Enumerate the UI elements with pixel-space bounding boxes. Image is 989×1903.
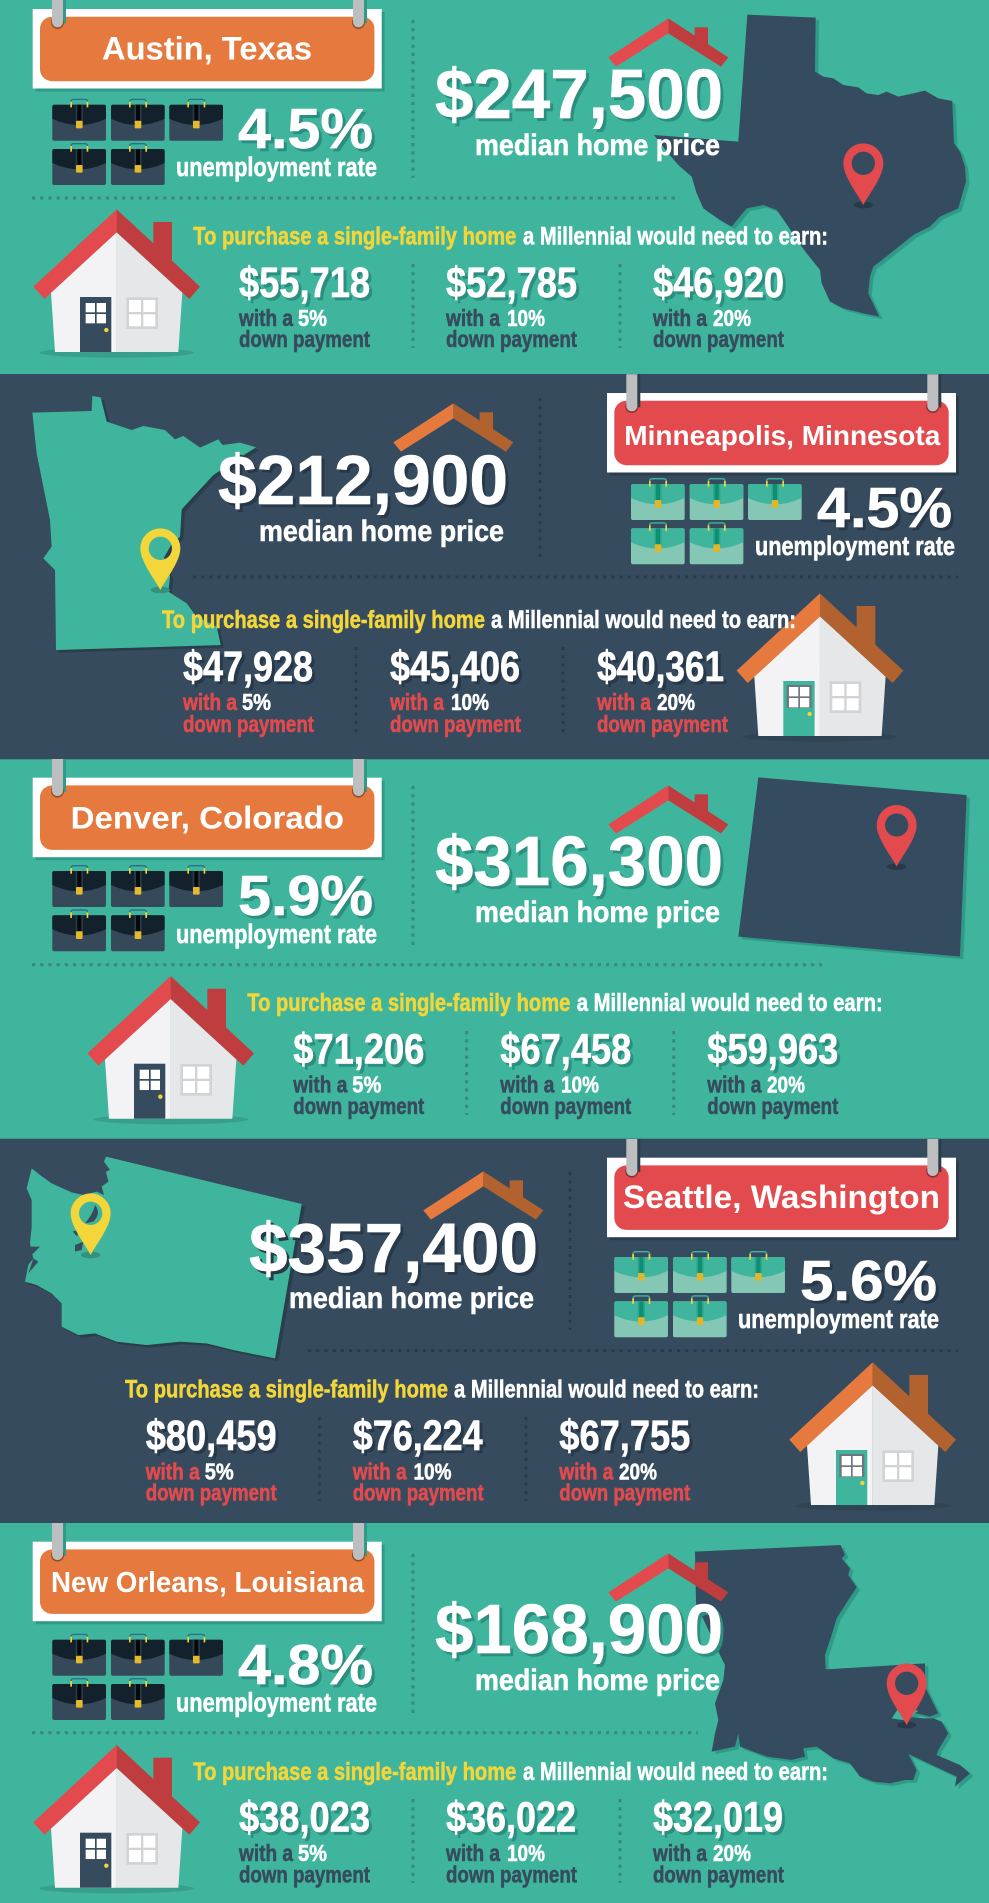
sign: New Orleans, Louisiana	[33, 1523, 385, 1624]
icon: roof over price	[393, 403, 513, 452]
heading: income needed: a Millennial would need to earn:	[454, 1376, 759, 1404]
icon: five briefcases	[52, 99, 223, 185]
column: 10% down: 10%	[507, 305, 545, 331]
column: 20% down: 20%	[713, 1840, 751, 1866]
column: 10% down	[445, 1794, 577, 1887]
stat: unemployment rate: unemployment rate	[176, 1688, 377, 1718]
column: 20% down: with a	[596, 689, 651, 715]
column: 5% down	[292, 1025, 425, 1119]
column: 5% down: down payment	[239, 326, 370, 352]
stat: median home price: $168,900	[435, 1590, 723, 1668]
column: 20% down: $67,755	[559, 1412, 690, 1460]
heading: income needed	[193, 222, 828, 250]
column: 5% down	[238, 259, 370, 352]
column: 20% down: with a	[558, 1458, 613, 1484]
column: 5% down: 5%	[298, 305, 327, 331]
column: 20% down	[596, 643, 728, 737]
sign: Austin, Texas	[33, 0, 385, 91]
heading: income needed: To purchase a single-family home	[125, 1376, 448, 1404]
column: 5% down: $47,928	[183, 643, 313, 691]
icon: roof over price	[608, 1553, 728, 1602]
column: 10% down: $76,224	[353, 1412, 483, 1460]
column: 10% down: 10%	[561, 1072, 599, 1098]
column: 5% down: 5%	[205, 1458, 234, 1484]
column: 10% down: 10%	[414, 1458, 452, 1484]
sign: Seattle, Washington	[607, 1139, 959, 1240]
column: 5% down: $38,023	[239, 1794, 370, 1842]
column: 10% down: $45,406	[390, 643, 520, 691]
column: 10% down: down payment	[353, 1480, 484, 1506]
column: 20% down: 20%	[767, 1072, 805, 1098]
column: 5% down: 5%	[352, 1072, 381, 1098]
sign: Denver, Colorado	[33, 759, 385, 860]
sign: Minneapolis, Minnesota: Minneapolis, Minnesota	[624, 420, 941, 451]
column: 5% down: with a	[238, 1840, 293, 1866]
panel: New Orleans, Louisiana	[32, 1523, 970, 1893]
column: 10% down	[445, 259, 577, 352]
stat: unemployment rate: unemployment rate	[176, 919, 377, 949]
icon: roof over price	[608, 785, 728, 834]
panel: Minneapolis, Minnesota	[0, 374, 989, 759]
stat: unemployment rate: unemployment rate	[738, 1304, 939, 1334]
stat: unemployment rate	[176, 1633, 377, 1718]
icon: roof over price	[608, 18, 728, 67]
map: Colorado	[738, 777, 967, 957]
icon: roof over price	[423, 1171, 543, 1220]
column: 5% down	[182, 643, 314, 737]
column: 10% down: down payment	[446, 1861, 577, 1887]
sign: Austin, Texas: Austin, Texas	[102, 30, 312, 66]
stat: unemployment rate	[738, 1249, 939, 1334]
icon: house	[789, 1362, 956, 1511]
panel: Austin, Texas	[32, 0, 966, 358]
stat: median home price: median home price	[289, 1282, 534, 1315]
column: 10% down: $67,458	[500, 1025, 631, 1073]
column: 20% down: with a	[706, 1072, 761, 1098]
column: 5% down: 5%	[298, 1840, 327, 1866]
column: 5% down: $71,206	[293, 1025, 424, 1073]
column: 20% down: 20%	[657, 689, 695, 715]
column: 10% down: with a	[389, 689, 444, 715]
map: Louisiana	[695, 1545, 970, 1787]
column: 5% down: with a	[182, 689, 237, 715]
column: 20% down	[652, 1794, 784, 1887]
column: 5% down: down payment	[146, 1480, 277, 1506]
section background	[0, 1139, 989, 1523]
stat: median home price: $247,500	[435, 55, 723, 133]
stat: unemployment rate: 5.6%	[800, 1249, 937, 1313]
column: 5% down: $80,459	[146, 1412, 277, 1460]
icon: house	[737, 593, 903, 742]
map: Minnesota	[32, 396, 256, 650]
panel: Denver, Colorado	[32, 759, 967, 1124]
column: 10% down: $52,785	[446, 259, 577, 307]
heading: income needed: To purchase a single-family home	[247, 989, 570, 1017]
heading: income needed	[247, 989, 883, 1017]
icon: five briefcases	[614, 1252, 785, 1337]
stat: unemployment rate: 5.9%	[238, 864, 373, 928]
column: 10% down: with a	[499, 1072, 554, 1098]
column: 20% down: down payment	[707, 1093, 839, 1119]
column: 5% down: down payment	[183, 711, 314, 737]
column: 20% down	[652, 259, 784, 352]
column: 5% down: down payment	[239, 1861, 370, 1887]
column: 5% down: with a	[238, 305, 293, 331]
column: 10% down: with a	[445, 1840, 500, 1866]
stat: median home price: median home price	[475, 129, 720, 162]
column: 20% down: 20%	[713, 305, 751, 331]
column: 20% down: with a	[652, 305, 707, 331]
column: 20% down: down payment	[653, 1861, 784, 1887]
column: 10% down	[499, 1025, 632, 1119]
heading: income needed: a Millennial would need to earn:	[523, 1758, 828, 1786]
column: 10% down: down payment	[390, 711, 521, 737]
column: 5% down	[145, 1412, 277, 1506]
column: 20% down: $40,361	[597, 643, 724, 691]
heading: income needed	[162, 606, 796, 634]
column: 20% down: down payment	[559, 1480, 691, 1506]
sign: New Orleans, Louisiana: New Orleans, Louisiana	[51, 1567, 365, 1599]
column: 10% down: 10%	[451, 689, 489, 715]
heading: income needed: To purchase a single-family home	[193, 222, 516, 250]
column: 5% down: $55,718	[239, 259, 370, 307]
stat: unemployment rate: 4.8%	[238, 1633, 373, 1697]
section background	[0, 374, 989, 759]
column: 20% down: $32,019	[653, 1794, 783, 1842]
column: 20% down: with a	[652, 1840, 707, 1866]
icon: house	[33, 209, 200, 358]
icon: house	[33, 1745, 200, 1893]
column: 10% down	[389, 643, 521, 737]
sign: Denver, Colorado: Denver, Colorado	[71, 799, 344, 835]
column: 10% down: $36,022	[446, 1794, 576, 1842]
column: 10% down: down payment	[500, 1093, 632, 1119]
stat: unemployment rate: 4.5%	[238, 97, 373, 161]
column: 10% down	[352, 1412, 484, 1506]
map: Texas	[654, 15, 966, 317]
column: 5% down: with a	[145, 1458, 200, 1484]
sign: Seattle, Washington: Seattle, Washington	[623, 1179, 940, 1215]
column: 20% down: $59,963	[707, 1025, 838, 1073]
column: 20% down: down payment	[597, 711, 728, 737]
icon: five briefcases	[631, 479, 802, 564]
column: 20% down: $46,920	[653, 259, 784, 307]
heading: income needed: a Millennial would need to earn:	[577, 989, 883, 1017]
column: 20% down	[706, 1025, 839, 1119]
stat: median home price: $357,400	[249, 1209, 538, 1287]
stat: median home price: $212,900	[218, 441, 508, 519]
column: 5% down	[238, 1794, 370, 1887]
column: 20% down	[558, 1412, 691, 1506]
heading: income needed	[193, 1758, 828, 1786]
icon: house	[87, 976, 254, 1124]
heading: income needed: a Millennial would need to earn:	[491, 606, 796, 634]
panel: Seattle, Washington	[0, 1139, 989, 1523]
stat: unemployment rate	[176, 97, 377, 182]
column: 5% down: down payment	[293, 1093, 425, 1119]
stat: median home price: median home price	[475, 896, 720, 929]
stat: median home price: median home price	[259, 515, 504, 548]
column: 20% down: 20%	[619, 1458, 657, 1484]
heading: income needed: To purchase a single-family home	[162, 606, 485, 634]
stat: unemployment rate	[755, 476, 955, 561]
column: 10% down: down payment	[446, 326, 577, 352]
stat: unemployment rate: 4.5%	[817, 476, 952, 540]
column: 10% down: with a	[352, 1458, 407, 1484]
heading: income needed	[125, 1376, 759, 1404]
map: Washington	[25, 1157, 302, 1358]
column: 10% down: with a	[445, 305, 500, 331]
stat: median home price: $316,300	[435, 822, 723, 900]
column: 20% down: down payment	[653, 326, 784, 352]
icon: five briefcases	[52, 866, 223, 951]
sign: Minneapolis, Minnesota	[607, 374, 959, 476]
column: 10% down: 10%	[507, 1840, 545, 1866]
column: 5% down: with a	[292, 1072, 347, 1098]
heading: income needed: To purchase a single-family home	[193, 1758, 516, 1786]
stat: unemployment rate	[176, 864, 377, 949]
stat: unemployment rate: unemployment rate	[176, 152, 377, 182]
icon: five briefcases	[52, 1634, 223, 1720]
column: 5% down: 5%	[242, 689, 271, 715]
heading: income needed: a Millennial would need to earn:	[523, 222, 828, 250]
stat: median home price: median home price	[475, 1664, 720, 1697]
